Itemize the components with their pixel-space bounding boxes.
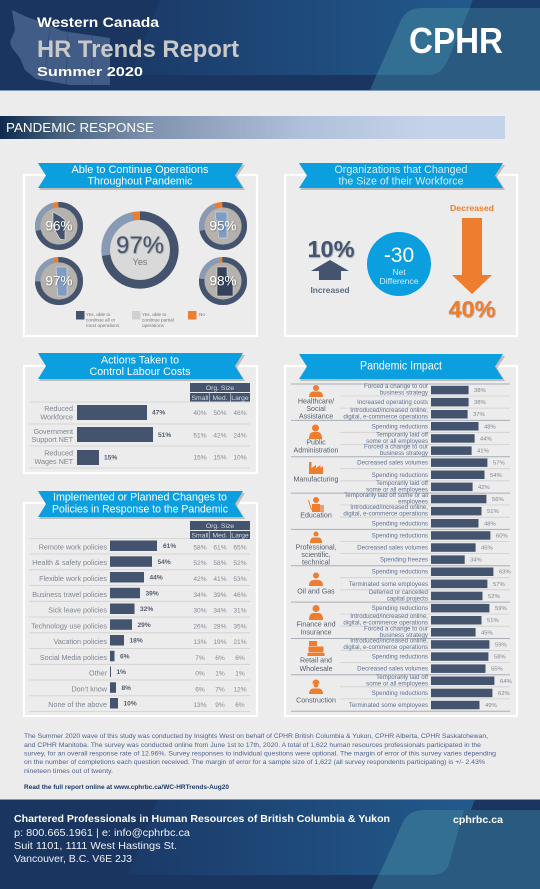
panel: policy changes [24,491,257,716]
bar chart: policy rows: 21% [233,639,247,646]
footer banner [0,799,540,889]
ribbon heading: policies: Policies in Response to the Pandemic [52,504,229,516]
sector: manufacturing: some or all employees [366,486,428,493]
donut: British Columbia 96% [38,205,80,247]
sector: education: 48% [484,521,497,527]
row: reduced wages: 10% [233,454,247,462]
panel: pandemic impact [285,354,517,716]
sector: professional, scientific, technical: Spending reductions [372,532,428,539]
sector: retail and wholesale: 59% [495,642,508,648]
sector: oil and gas [297,568,512,602]
table header: org size: Large [231,532,249,540]
sector: finance and insurance: Introduced/increased online, [350,613,428,620]
bar chart: policy rows: 28% [213,623,227,630]
bar chart: policy rows: 9% [215,702,225,709]
legend [76,311,205,328]
icon: finance worker [309,605,323,620]
icon: construction worker [309,680,323,694]
sector: oil and gas: 57% [493,582,506,588]
sector: oil and gas: 52% [488,594,501,600]
row: government support: 51% [158,432,171,439]
ribbon heading: operations: Able to Continue Operations [72,164,208,176]
ribbon heading: operations: Throughout Pandemic [88,176,193,188]
sector: construction: 64% [500,679,513,685]
sector: construction: Construction [296,696,336,704]
ribbon heading: workforce: Organizations that Changed [334,164,468,176]
sector: finance and insurance: 45% [481,630,494,636]
bar chart: policy rows: 58% [193,544,207,552]
stat: decreased 40%: 40% [448,296,496,322]
sector: public administration: Forced a change to our [364,444,428,451]
icon: teacher [308,497,324,512]
sector: finance and insurance [296,604,508,639]
bar chart: policy rows: 41% [213,576,227,583]
bar chart: policy rows: 12% [233,686,247,693]
row: reduced workforce: 46% [233,410,247,417]
bar chart: policy rows: None of the above [48,700,107,709]
icon: professional [310,532,322,543]
bar chart: policy rows: 6% [215,655,225,662]
ribbon heading: labour costs: Actions Taken to [101,354,179,366]
title: HR Trends Report [37,36,239,63]
bar chart: policy rows: 1% [116,669,126,676]
donut: British Columbia 96%: 96% [45,218,73,234]
ribbon heading: workforce: the Size of their Workforce [338,176,464,188]
sector: healthcare and social assistance: Healthcare/ [298,398,334,406]
title [37,15,239,79]
bar chart: policy rows: Remote work policies [39,542,107,552]
bar chart: policy rows: 44% [150,574,163,582]
icon: public administrator [309,424,322,439]
sector: education: digital, e-commerce operations [343,511,428,518]
icon: oil worker [309,572,323,586]
bar chart: policy rows: 10% [124,700,137,708]
row: reduced workforce: 50% [213,410,227,417]
sector: education: 56% [492,497,505,503]
bar chart: policy rows: Health & safety policies [32,558,107,567]
row: reduced workforce: 40% [193,410,207,417]
sector: manufacturing: Temporarily laid off [376,480,428,487]
row: reduced wages: 15% [213,454,227,462]
bar chart: policy rows: 42% [193,576,207,583]
sector: retail and wholesale: Wholesale [299,665,333,673]
bar chart: policy rows: 61% [213,544,227,552]
sector: finance and insurance: Forced a change to our [364,625,428,632]
text block: survey methodology: survey, for an overall response rate of 12.96%. Survey responses to individual questions were optional. The margin of error of this survey varies depending [24,750,497,758]
row: government support: Support NET [31,435,74,444]
bar chart: policy rows: 19% [213,639,227,646]
title: Western Canada [37,15,160,30]
bar chart: policy rows: 52% [193,560,207,567]
ribbon heading: labour costs [38,353,245,381]
icon: western canada map [10,10,110,85]
ribbon heading: policies: Implemented or Planned Changes to [53,492,227,504]
sector: finance and insurance: 59% [495,606,508,612]
logo: CPHR: CPHR [409,20,503,61]
bar chart: policy rows: 52% [233,560,247,567]
contact details: Vancouver, B.C. V6E 2J3 [14,854,132,865]
bar chart: policy rows: 31% [233,608,247,614]
bar chart: policy rows: 6% [120,653,130,660]
panel: actions taken to control labour costs [24,353,257,473]
bar chart: policy rows: 34% [213,608,227,614]
sector: professional, scientific, technical: Spending freezes [380,557,428,564]
bar chart: policy rows: 6% [235,655,245,662]
sector: oil and gas: Oil and Gas [297,588,335,596]
section heading: pandemic response [0,116,505,139]
bar chart: policy rows: 30% [193,608,207,614]
legend: continue partial [142,318,174,322]
bar chart: policy rows: 26% [193,623,207,630]
table header: org size: Med. [212,395,228,402]
ribbon heading: policies [38,491,245,519]
bar chart: policy rows: 6% [235,702,245,709]
sector: retail and wholesale: 55% [491,667,504,673]
bar chart: policy rows: Vacation policies [54,637,107,646]
bar chart: policy rows [31,540,247,709]
sector: public administration: 48% [484,424,497,430]
sector: professional, scientific, technical: 45% [481,546,494,552]
ribbon heading: pandemic impact [299,354,505,381]
sector: professional, scientific, technical: technical [302,558,330,566]
sector: public administration: some or all employees [366,438,428,445]
stat: net difference: -30 [384,244,414,267]
icon: healthcare worker [309,385,323,397]
website: cphrbc.ca [453,815,503,826]
bar chart: policy rows: 35% [233,623,247,630]
sector: construction: Spending reductions [372,690,428,697]
bar chart: policy rows: 13% [193,702,207,709]
sector: manufacturing: 57% [493,461,506,467]
bar chart: policy rows: 34% [193,592,207,599]
sector: oil and gas: 63% [499,570,512,576]
sector: public administration: Public [306,438,326,446]
table header: org size [190,521,250,540]
sector: construction: Terminated some employees [349,702,428,709]
bar chart: policy rows: 39% [146,590,159,597]
donut: Manitoba 98%: 98% [209,274,237,288]
sector: manufacturing: Spending reductions [372,472,428,479]
bar chart: policy rows: 32% [140,606,153,613]
row: reduced wages: Reduced [44,448,73,458]
row: reduced workforce: Workforce [40,412,73,422]
sector: professional, scientific, technical: scientific, [301,551,331,559]
bar chart: policy rows: 53% [233,576,247,583]
row: government support: 51% [193,432,207,440]
row: reduced wages: Wages NET [35,457,74,466]
bar chart: policy rows: 1% [235,670,245,678]
sector: healthcare and social assistance: Assistance [299,412,333,420]
sector: healthcare and social assistance: 38% [474,388,487,394]
legend: operations [142,323,165,328]
sector: finance and insurance: business strategy [380,632,429,639]
row: reduced workforce [40,404,247,422]
row: government support: 42% [213,432,227,440]
bar chart: policy rows: Don’t know [71,684,108,693]
contact details: Chartered Professionals in Human Resources of British Columbia & Yukon [14,813,390,825]
text block: survey methodology [24,733,497,775]
bar chart: policy rows: Social Media policies [40,653,107,662]
panel: organizations that changed workforce size [285,163,517,336]
legend: Yes, able to [86,312,111,317]
sector: manufacturing [294,458,506,493]
sector: education [300,492,505,528]
sector: construction: 49% [485,703,498,709]
stat: increased 10%: Increased [310,285,350,295]
sector: professional, scientific, technical: Professional, [295,544,337,552]
bar chart: policy rows: Business travel policies [32,590,107,599]
sector: education: Introduced/increased online, [350,504,428,511]
contact details: p: 800.665.1961 | e: info@cphrbc.ca [14,828,190,839]
sector: retail and wholesale: Spending reductions [372,654,428,660]
bar chart: policy rows: 39% [213,592,227,599]
sector: finance and insurance: Finance and [296,620,336,628]
legend: most operations [86,323,120,328]
sector: public administration: 44% [480,436,493,442]
bar chart: policy rows: 0% [195,670,205,678]
row: government support: 24% [233,432,247,440]
legend: No [199,312,205,317]
stat: decreased 40%: Decreased [450,203,494,213]
sector: construction: 62% [498,691,511,697]
bar chart: policy rows: 46% [233,592,247,599]
stat: increased 10%: 10% [307,236,355,262]
bar chart: policy rows: 7% [215,686,225,693]
table header: org size [190,383,250,402]
bar chart: policy rows: Flexible work policies [39,574,107,583]
panel: able to continue operations [24,163,257,336]
sector: healthcare and social assistance: Introduced/increased online, [350,407,428,414]
bar chart: policy rows: 18% [130,638,143,644]
text block: survey methodology: and CPHR Manitoba. The survey was conducted online from June 1st to 17th, 2020. A total of 1,622 human resources professionals participated in the [24,742,482,749]
donut: Alberta 95% [202,205,244,247]
section heading: pandemic response: PANDEMIC RESPONSE [6,120,154,135]
bar chart: policy rows: 54% [158,559,171,566]
sector: healthcare and social assistance: digital, e-commerce operations [343,414,428,421]
sector: professional, scientific, technical: 60% [496,533,509,539]
sector: retail and wholesale: 58% [494,654,507,660]
sector: retail and wholesale: digital, e-commerce operations [343,644,428,651]
legend: Yes, able to [142,312,167,317]
sector: education: Spending reductions [372,520,428,527]
sector: public administration: 41% [477,449,490,455]
sector: education: Temporarily laid off some or all [344,492,428,499]
header banner [0,0,540,91]
donut: Saskatchewan 97% [38,260,80,302]
donut: Saskatchewan 97%: 97% [45,274,73,288]
sector: healthcare and social assistance [298,383,487,421]
sector: finance and insurance: digital, e-commerce operations [343,620,428,627]
sector: manufacturing: 54% [490,473,503,479]
bar chart: policy rows: Other [89,668,108,678]
title: Summer 2020 [37,64,143,79]
table header: org size: Small [192,395,209,402]
bar chart: policy rows: 13% [193,639,207,646]
link: full report: Read the full report online at www.cphrbc.ca/WC-HRTrends-Aug20 [24,784,229,791]
contact details [14,813,390,865]
row: reduced wages: 15% [193,454,207,462]
sector: retail and wholesale: Introduced/increased online, [350,638,428,644]
sector: retail and wholesale [299,638,508,673]
sector: oil and gas: Spending reductions [372,569,428,576]
icon: factory [309,462,323,474]
sector: finance and insurance: Insurance [300,628,332,636]
stat: decreased 40% [448,203,496,322]
table header: org size: Org. Size [206,385,234,392]
text block: survey methodology: The Summer 2020 wave of this study was conducted by Insights West on behalf of CPHR British Columbia & Yukon, CPHR Alberta, CPHR Saskatchewan, [24,733,488,740]
sector: oil and gas: Terminated some employees [349,581,428,588]
sector: public administration: Administration [294,446,339,454]
sector: professional, scientific, technical [295,531,509,566]
sector: public administration: business strategy [380,450,429,457]
sector: oil and gas: Deferred or cancelled [369,589,429,596]
bar chart: policy rows: 58% [213,560,227,567]
sector: healthcare and social assistance: 38% [474,400,487,406]
sector: finance and insurance: 51% [487,618,500,624]
sector: construction: some or all employees [366,680,428,687]
row: reduced wages [35,448,247,466]
sector: healthcare and social assistance: Forced a change to our [364,383,428,390]
contact details: Suit 1101, 1111 West Hastings St. [14,841,177,852]
donut: overall 97% [106,216,174,284]
sector: education: employees [398,498,428,506]
sector: healthcare and social assistance: Social [306,405,326,413]
sector: retail and wholesale: Decreased sales volumes [357,666,428,673]
text block: survey methodology: on the number of completions each question received. The margin of error for a sample size of 1,622 (all survey respondents participating) is +/- 2.43% [24,759,485,766]
sector: public administration: Spending reductions [372,423,428,430]
row: reduced workforce: Reduced [44,404,73,413]
bar chart: policy rows: 8% [122,685,131,692]
table header: org size: Org. Size [206,523,234,530]
sector: construction: Temporarily laid off [376,674,428,681]
sector: healthcare and social assistance: 37% [473,412,486,418]
sector: professional, scientific, technical: 34% [470,558,483,564]
donut: Alberta 95%: 95% [209,218,237,234]
sector: construction [296,674,513,709]
bar chart: policy rows: 29% [138,622,151,629]
sector: oil and gas: capital projects [387,596,428,602]
sector: public administration [294,422,497,457]
bar chart: policy rows: 1% [215,670,225,678]
table header: org size: Med. [212,532,228,540]
sector: education: Education [300,512,332,520]
row: reduced workforce: 47% [152,410,165,416]
sector: healthcare and social assistance: Increased operating costs [357,399,428,406]
sector: retail and wholesale: Retail and [300,656,332,664]
ribbon heading: operations [38,163,245,190]
ribbon heading: workforce [299,163,505,190]
legend: continue all or [86,318,116,322]
stat: increased 10% [307,236,355,295]
bar chart: policy rows: 65% [233,544,247,552]
row: reduced wages: 15% [104,454,117,462]
bar chart: policy rows: 7% [195,655,205,662]
sector: public administration: Temporarily laid off [376,432,428,438]
text block: survey methodology: nineteen times out of twenty. [24,768,113,775]
donut: overall 97%: Yes [133,257,148,267]
sector: finance and insurance: Spending reductions [372,605,428,612]
stat: net difference: Net [392,267,406,277]
sector: manufacturing: 42% [478,485,491,491]
bar chart: policy rows: 61% [163,543,176,550]
icon: cash register [308,641,324,656]
sector: education: 51% [487,509,500,515]
ribbon heading: pandemic impact: Pandemic Impact [360,360,443,372]
sector: professional, scientific, technical: Decreased sales volumes [357,544,428,552]
donut: Manitoba 98% [202,260,244,302]
bar chart: policy rows: Sick leave policies [48,606,107,614]
table header: org size: Large [231,395,249,402]
ribbon heading: labour costs: Control Labour Costs [90,366,190,378]
sector: healthcare and social assistance: business strategy [380,390,429,396]
donut: overall 97%: 97% [116,232,164,259]
sector: manufacturing: Decreased sales volumes [357,460,428,467]
row: government support: Government [33,427,73,436]
bar chart: policy rows: 6% [195,686,205,693]
stat: net difference: Difference [379,276,419,286]
table header: org size: Small [192,532,209,540]
bar chart: policy rows: Technology use policies [31,621,107,630]
stat: net difference [367,232,431,296]
row: government support [31,427,247,444]
sector: manufacturing: Manufacturing [294,476,339,484]
